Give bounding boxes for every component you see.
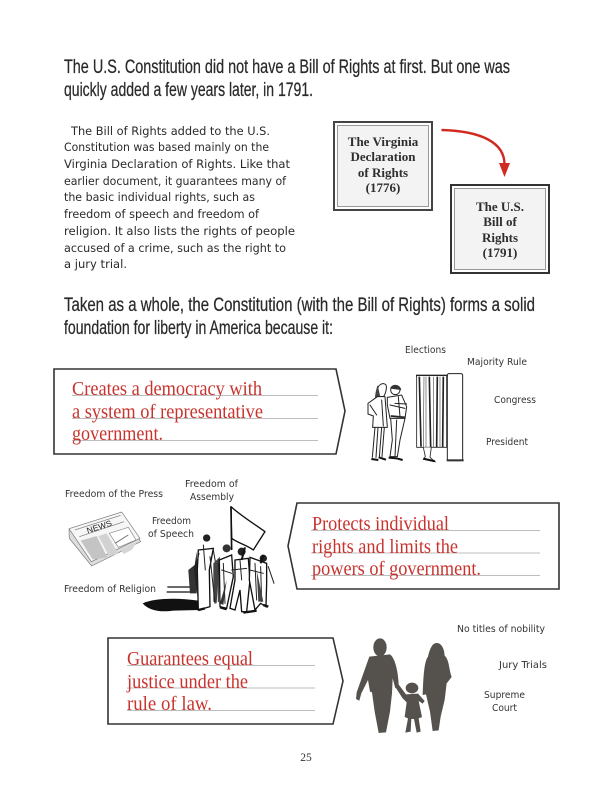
labels: rights terms: Assembly (190, 492, 234, 503)
callout: guarantees equal justice: justice under the (126, 672, 248, 693)
callout: guarantees equal justice (108, 638, 343, 724)
heading: foundation for liberty: foundation for liberty in America because it: (64, 318, 333, 339)
icon: voters waiting at voting booth (368, 374, 464, 462)
icon: newspaper: NEWS (85, 519, 113, 535)
panel: Virginia Declaration box: The Virginia (348, 134, 419, 149)
panel: U.S. Bill of Rights box: Rights (482, 230, 518, 245)
icon: child (395, 683, 425, 733)
icon: father (356, 638, 399, 733)
text block: Bill of Rights explanation: earlier document, it guarantees many of (64, 174, 287, 188)
panel: Virginia Declaration box (334, 122, 432, 210)
labels: justice terms: Jury Trials (498, 660, 547, 671)
panel: U.S. Bill of Rights box: (1791) (483, 245, 517, 260)
text block: Bill of Rights explanation: the basic individual rights, such as (64, 190, 255, 204)
icon: woman voter (368, 384, 387, 460)
text block: Bill of Rights explanation (64, 124, 295, 271)
text block: Bill of Rights explanation: accused of a crime, such as the right to (64, 241, 286, 255)
labels: rights terms: of Speech (148, 529, 194, 540)
callout: creates a democracy: a system of representative (72, 402, 263, 423)
text block: Bill of Rights explanation: a jury trial. (64, 257, 127, 271)
icon: newspaper (69, 512, 141, 566)
labels: justice terms (457, 624, 547, 714)
callout: guarantees equal justice: Guarantees equal (127, 649, 254, 670)
callout: creates a democracy (54, 369, 345, 454)
panel: Virginia Declaration box: (1776) (366, 180, 400, 195)
icon: mother (423, 643, 452, 731)
labels: rights terms: Freedom (152, 516, 191, 527)
callout: protects individual rights (288, 503, 559, 589)
callout: protects individual rights: Protects individual (312, 514, 450, 535)
text block: Bill of Rights explanation: Virginia Declaration of Rights. Like that (64, 157, 290, 171)
labels: democracy terms (405, 345, 536, 448)
panel: U.S. Bill of Rights box: The U.S. (476, 199, 524, 214)
labels: rights terms (64, 479, 239, 595)
callout: guarantees equal justice: rule of law. (127, 694, 212, 715)
panel: U.S. Bill of Rights box (451, 185, 549, 273)
icon: voting booth (416, 374, 464, 462)
panel: Virginia Declaration box: of Rights (358, 165, 408, 180)
callout: creates a democracy: Creates a democracy with (72, 379, 262, 400)
labels: justice terms: Court (492, 703, 517, 714)
text block: Bill of Rights explanation: The Bill of Rights added to the U.S. (70, 124, 270, 138)
text block: Bill of Rights explanation: Constitution was based mainly on the (64, 140, 269, 154)
text block: Bill of Rights explanation: religion. It also lists the rights of people (64, 224, 295, 238)
labels: democracy terms: Majority Rule (467, 357, 527, 368)
icon: family silhouette (356, 638, 452, 733)
icon: man voter (387, 385, 407, 460)
arrow: Virginia to U.S. Bill of Rights (442, 130, 510, 177)
labels: justice terms: Supreme (484, 690, 525, 701)
page number: 25 (300, 752, 312, 764)
panel: U.S. Bill of Rights box: Bill of (483, 214, 517, 229)
heading: intro statement (64, 57, 510, 101)
labels: rights terms: Freedom of Religion (64, 584, 156, 595)
icon: crowd with flag (143, 507, 274, 613)
icon: flag (231, 507, 265, 550)
icon: marchers (188, 534, 274, 613)
labels: rights terms: Freedom of (185, 479, 239, 490)
labels: democracy terms: Elections (405, 345, 446, 356)
labels: democracy terms: Congress (494, 395, 536, 406)
text block: Bill of Rights explanation: freedom of speech and freedom of (64, 207, 260, 221)
callout: protects individual rights: powers of government. (312, 559, 481, 580)
heading: intro statement: quickly added a few years later, in 1791. (64, 80, 313, 101)
heading: foundation for liberty (64, 295, 535, 339)
icon: ground shadow (143, 599, 200, 611)
labels: justice terms: No titles of nobility (457, 624, 545, 635)
labels: democracy terms: President (486, 437, 528, 448)
callout: protects individual rights: rights and limits the (312, 537, 458, 558)
panel: Virginia Declaration box: Declaration (351, 149, 416, 164)
labels: rights terms: Freedom of the Press (65, 489, 163, 500)
callout: creates a democracy: government. (72, 424, 163, 445)
